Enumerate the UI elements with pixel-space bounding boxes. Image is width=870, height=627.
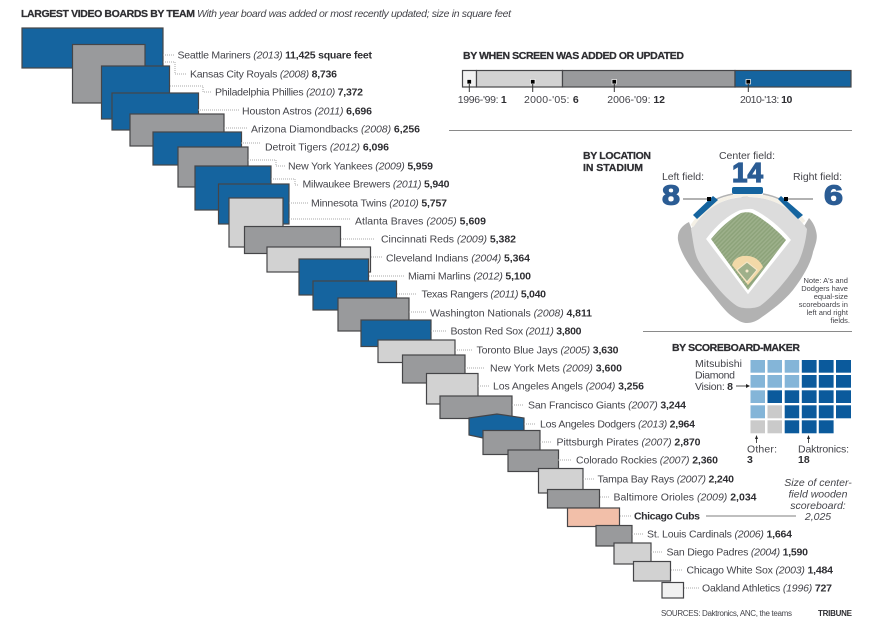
outer stands: [678, 195, 817, 323]
team labels: Colorado Rockies (2007) 2,360: [576, 454, 718, 466]
team labels: Tampa Bay Rays (2007) 2,240: [598, 474, 734, 486]
timeline labels: 2006-'09: 12: [607, 94, 665, 106]
maker labels: [695, 358, 849, 466]
team labels: Toronto Blue Jays (2005) 3,630: [476, 344, 619, 356]
team labels: Texas Rangers (2011) 5,040: [422, 288, 546, 300]
team labels: Detroit Tigers (2012) 6,096: [265, 142, 389, 154]
team labels: Houston Astros (2011) 6,696: [242, 106, 372, 118]
heading: by when: BY WHEN SCREEN WAS ADDED OR UPDATED: [463, 50, 684, 62]
team labels: Pittsburgh Pirates (2007) 2,870: [556, 436, 701, 448]
wooden scoreboard note: field wooden: [789, 488, 848, 500]
source line: TRIBUNE: [818, 609, 853, 618]
team labels: Cincinnati Reds (2009) 5,382: [381, 234, 516, 246]
maker labels: Diamond: [695, 370, 735, 382]
team labels: Philadelphia Phillies (2010) 7,372: [215, 86, 363, 98]
stacked timeline bar: [462, 70, 851, 87]
team labels: Cleveland Indians (2004) 5,364: [386, 252, 530, 264]
location labels: Right field:: [793, 171, 842, 183]
timeline markers: [467, 80, 750, 92]
timeline labels: 2010-'13: 10: [740, 94, 792, 106]
note: Note: A's and: [804, 276, 848, 285]
inner seating bowl: [691, 197, 807, 308]
title: With year board was added or most recently updated; size in square feet: [197, 8, 512, 20]
callout lines: [683, 197, 813, 201]
note: scoreboards in: [799, 300, 848, 309]
diamond: [737, 262, 757, 282]
note: Dodgers have: [801, 284, 848, 293]
team labels: Washington Nationals (2008) 4,811: [430, 308, 592, 320]
source line: SOURCES: Daktronics, ANC, the teams: [661, 609, 792, 618]
team labels: Miami Marlins (2012) 5,100: [408, 270, 531, 282]
chart: stacked video board rectangles: [22, 28, 684, 598]
team labels: Chicago White Sox (2003) 1,484: [686, 564, 833, 576]
timeline labels: 2000-'05: 6: [524, 94, 579, 106]
infield dirt: [732, 256, 763, 285]
note: fields.: [830, 316, 850, 325]
location labels: Left field:: [662, 171, 704, 183]
note: equal-size: [814, 292, 848, 301]
panel: by when screen was added or updated: [458, 50, 851, 106]
field outline: [707, 210, 790, 293]
wooden scoreboard note: 2,025: [804, 511, 831, 523]
heading: by location: BY LOCATION: [583, 150, 651, 162]
maker labels: Mitsubishi: [695, 358, 742, 370]
maker labels: 3: [747, 454, 753, 466]
team labels: Minnesota Twins (2010) 5,757: [311, 198, 447, 210]
outfield grass: [711, 212, 786, 290]
wooden scoreboard note: Size of center-: [784, 477, 852, 489]
team labels: Chicago Cubs: [634, 510, 700, 522]
team labels: Baltimore Orioles (2009) 2,034: [614, 492, 757, 504]
team labels: Seattle Mariners (2013) 11,425 square feet: [178, 50, 372, 62]
panel: by scoreboard-maker: [672, 342, 852, 523]
maker labels: Other:: [747, 444, 777, 456]
stadium diagram: [678, 194, 817, 323]
note: left and right: [807, 308, 849, 317]
team labels: Boston Red Sox (2011) 3,800: [450, 326, 582, 338]
team labels: Arizona Diamondbacks (2008) 6,256: [251, 124, 420, 136]
location labels: 6: [824, 180, 843, 210]
team labels: Atlanta Braves (2005) 5,609: [355, 216, 486, 228]
arrows: [736, 384, 810, 443]
maker labels: 18: [798, 454, 810, 466]
heading: scoreboard-maker: BY SCOREBOARD-MAKER: [672, 342, 800, 354]
leader lines: [163, 55, 699, 588]
location labels: [662, 150, 843, 210]
team labels: Kansas City Royals (2008) 8,736: [190, 68, 337, 80]
waffle chart: [750, 360, 851, 433]
team labels: San Francisco Giants (2007) 3,244: [528, 400, 686, 412]
location labels: Center field:: [719, 150, 775, 162]
team labels: San Diego Padres (2004) 1,590: [666, 546, 808, 558]
maker labels: Daktronics:: [798, 444, 849, 456]
scoreboards: [693, 187, 803, 219]
team labels: New York Yankees (2009) 5,959: [288, 160, 433, 172]
title: [21, 8, 512, 20]
source line: [661, 609, 853, 618]
timeline labels: [458, 94, 792, 106]
heading: by location: IN STADIUM: [583, 162, 643, 174]
panel: by location in stadium: [583, 150, 850, 325]
maker labels: Vision: 8: [695, 381, 733, 393]
timeline labels: 1996-'99: 1: [458, 94, 507, 106]
top white arc: [692, 195, 804, 226]
location labels: 8: [662, 180, 680, 210]
team labels: Los Angeles Dodgers (2013) 2,964: [540, 418, 695, 430]
upper deck rim: [704, 194, 792, 207]
team labels: [178, 50, 833, 594]
team labels: Milwaukee Brewers (2011) 5,940: [302, 178, 450, 190]
team labels: Los Angeles Angels (2004) 3,256: [493, 380, 644, 392]
team labels: St. Louis Cardinals (2006) 1,664: [647, 528, 792, 540]
wooden scoreboard note: scoreboard:: [790, 500, 846, 512]
team labels: Oakland Athletics (1996) 727: [702, 582, 832, 594]
cubs line: [706, 515, 796, 517]
team labels: New York Mets (2009) 3,600: [490, 362, 622, 374]
title: LARGEST VIDEO BOARDS BY TEAM: [21, 8, 195, 20]
location labels: 14: [732, 157, 763, 188]
